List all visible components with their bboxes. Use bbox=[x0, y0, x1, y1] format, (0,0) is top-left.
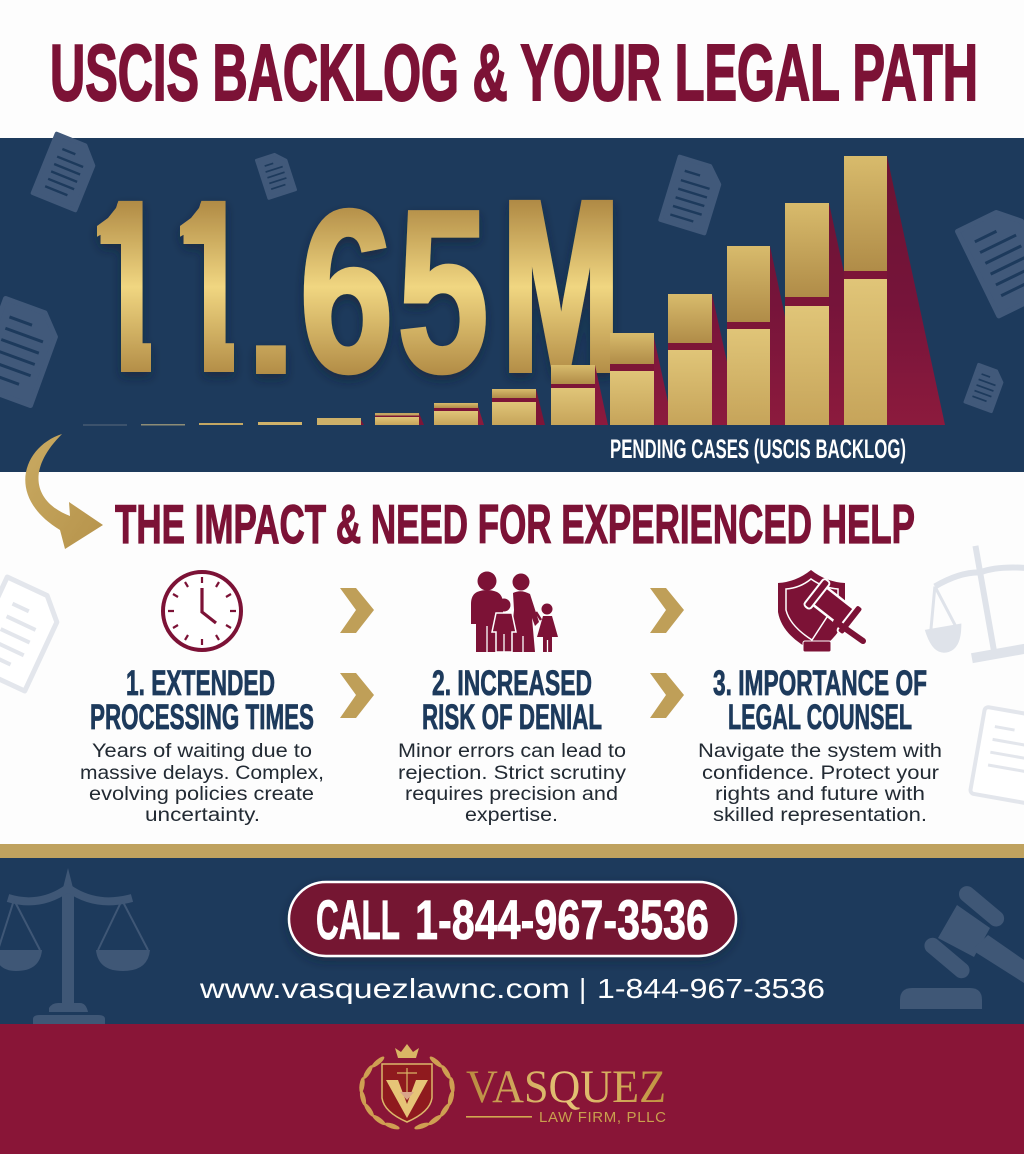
step 1 heading: PROCESSING TIMES bbox=[90, 698, 314, 737]
logo: firm type: LAW FIRM, PLLC bbox=[539, 1109, 666, 1126]
step 1 heading: 1. EXTENDED bbox=[126, 664, 275, 703]
step 3 heading bbox=[713, 664, 927, 737]
panel: footer bbox=[0, 1024, 1024, 1154]
step 1 description: uncertainty. bbox=[145, 805, 260, 826]
icon: document watermark 4 bbox=[958, 204, 1024, 316]
step 2 heading: 2. INCREASED bbox=[432, 664, 592, 703]
icon: shield and gavel bbox=[778, 570, 864, 652]
big number bbox=[96, 200, 616, 382]
icon: family bbox=[471, 572, 558, 652]
icon: document watermark right bbox=[970, 707, 1024, 805]
panel: step 3 bbox=[698, 570, 942, 826]
big number: 5 bbox=[397, 162, 489, 420]
icon: document watermark 5 bbox=[0, 299, 62, 405]
website and phone: 1-844-967-3536 bbox=[597, 973, 825, 1004]
step 1 description: Years of waiting due to bbox=[92, 741, 312, 762]
call button bbox=[289, 882, 736, 956]
icon: gavel watermark bbox=[900, 883, 1024, 1009]
icon: clock bbox=[163, 572, 241, 650]
gold divider band bbox=[0, 844, 1024, 858]
big number: 1 bbox=[122, 151, 274, 422]
logo: firm name: VASQUEZ bbox=[466, 1061, 666, 1113]
step 2 description: rejection. Strict scrutiny bbox=[398, 763, 627, 784]
step 3 description bbox=[698, 741, 942, 826]
step 2 heading bbox=[422, 664, 602, 737]
icon: scales watermark bbox=[0, 868, 150, 1024]
icon: curved gold arrow bbox=[25, 434, 103, 549]
step 1 description: evolving policies create bbox=[89, 784, 314, 805]
icon: chevron 1a bbox=[340, 588, 374, 633]
big number: M bbox=[502, 152, 620, 420]
big number: 6 bbox=[299, 162, 394, 420]
big number: . bbox=[246, 223, 296, 407]
icon: chevron 2a bbox=[650, 588, 684, 633]
website and phone: www.vasquezlawnc.com bbox=[199, 973, 570, 1004]
step 2 description bbox=[398, 741, 627, 826]
logo: rule bbox=[466, 1116, 532, 1118]
panel: backlog hero bbox=[0, 134, 1024, 472]
step 2 description: expertise. bbox=[465, 805, 558, 826]
step 3 description: Navigate the system with bbox=[698, 741, 942, 762]
step 3 heading: LEGAL COUNSEL bbox=[728, 698, 912, 737]
step 1 description: massive delays. Complex, bbox=[80, 763, 324, 784]
icon: document watermark 3 bbox=[660, 157, 724, 233]
big number: 1 bbox=[39, 151, 191, 422]
step 1 heading bbox=[90, 664, 314, 737]
website and phone: | bbox=[579, 973, 586, 1004]
step 3 description: skilled representation. bbox=[713, 805, 927, 826]
website and phone bbox=[199, 973, 825, 1004]
panel: call to action bbox=[0, 858, 1024, 1024]
icon: document watermark 1 bbox=[33, 134, 99, 210]
bar chart: growing backlog bbox=[83, 156, 945, 426]
step 3 description: rights and future with bbox=[715, 784, 925, 805]
icon: document watermark 2 bbox=[257, 152, 295, 198]
call button: 1-844-967-3536 bbox=[415, 888, 709, 951]
panel: step 2 bbox=[398, 572, 627, 826]
icon: chevron 2b bbox=[650, 673, 684, 718]
logo: shield bbox=[382, 1064, 432, 1122]
panel: step 1 bbox=[80, 572, 324, 826]
icon: scales watermark right bbox=[915, 536, 1024, 665]
logo: laurel wreath bbox=[358, 1055, 456, 1131]
step 2 heading: RISK OF DENIAL bbox=[422, 698, 602, 737]
icon: document watermark left bbox=[0, 577, 65, 691]
logo: crown bbox=[395, 1044, 419, 1058]
call button: CALL bbox=[316, 888, 400, 951]
step 1 description bbox=[80, 741, 324, 826]
step 3 description: confidence. Protect your bbox=[702, 763, 940, 784]
icon: chevron 1b bbox=[340, 673, 374, 718]
step 2 description: requires precision and bbox=[405, 784, 618, 805]
step 2 description: Minor errors can lead to bbox=[398, 741, 626, 762]
icon: document watermark 6 bbox=[965, 364, 1005, 412]
